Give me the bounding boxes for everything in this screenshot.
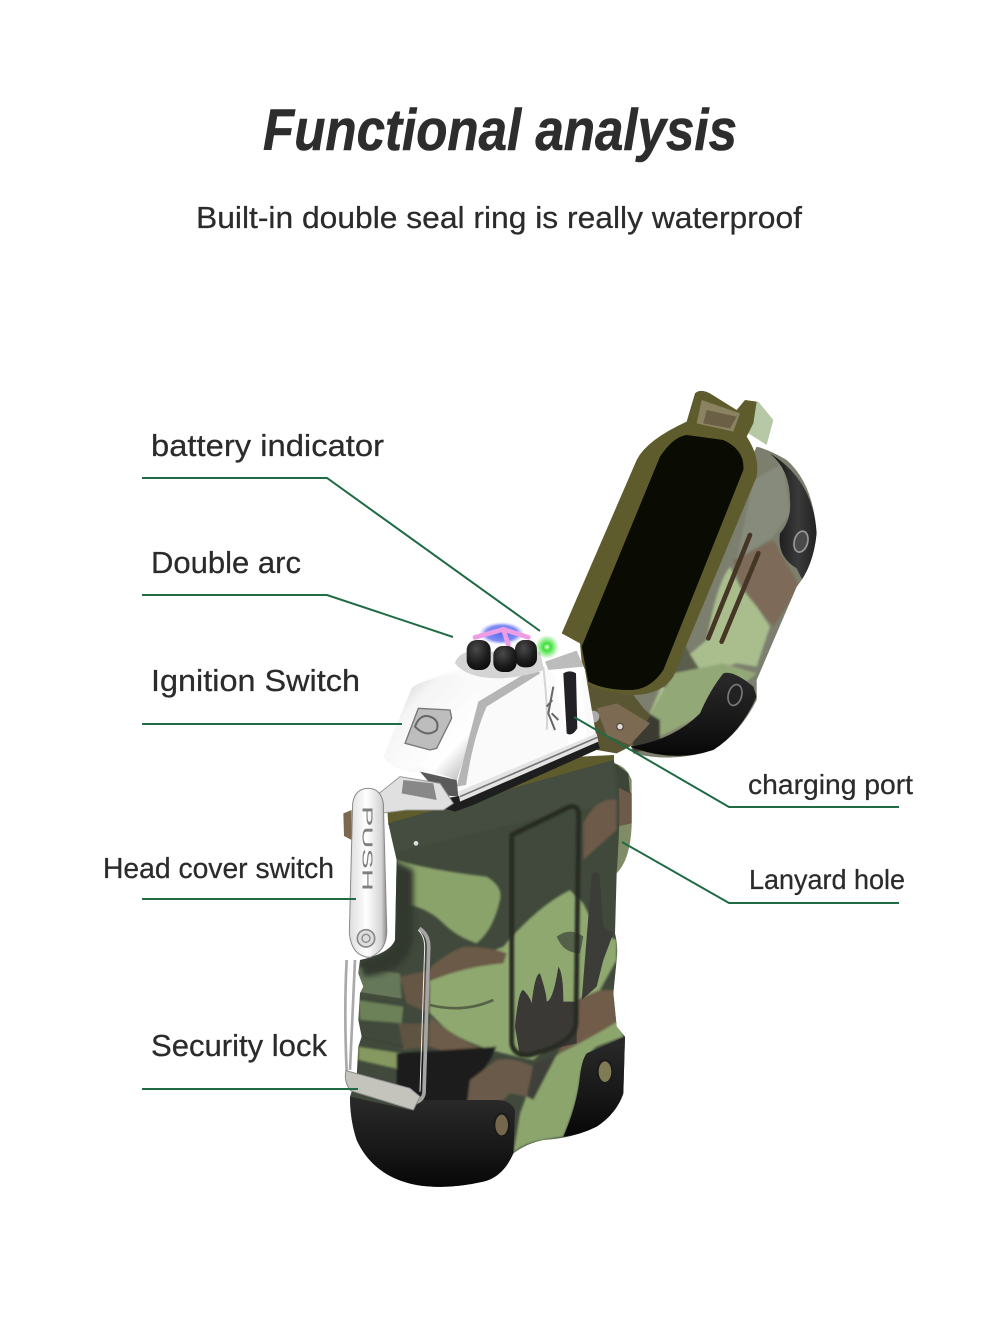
callout: double arc (142, 545, 453, 637)
callout: double arc: Double arc (151, 545, 301, 580)
switch recess shadow (360, 860, 413, 977)
lid bottom black cap (630, 673, 757, 756)
usb symbol (547, 687, 558, 730)
callout: charging port (574, 717, 913, 807)
camo silhouette marks (515, 967, 577, 1057)
switch plate (349, 788, 387, 957)
body top shelf (387, 755, 614, 825)
rib grooves (360, 993, 493, 1047)
chrome lower band (420, 738, 600, 812)
lighter lid (562, 391, 827, 767)
electrode posts and arc (455, 622, 544, 678)
lanyard strip (615, 763, 632, 873)
arc glow (479, 622, 524, 645)
lighter body (343, 755, 637, 1193)
lighter illustration (343, 391, 827, 1193)
hinge backing (582, 677, 650, 753)
bottom black cap left (350, 1097, 515, 1187)
title: Functional analysis (263, 98, 737, 163)
belt clip (512, 806, 579, 1055)
lid vents (708, 535, 758, 642)
chrome body (383, 650, 597, 797)
lid top black cap (770, 453, 817, 582)
callout: charging port: charging port (748, 769, 913, 800)
lid camo shell (630, 446, 817, 758)
infographic canvas (105, 107, 913, 1187)
callout: security lock: Security lock (151, 1028, 327, 1063)
chrome bottom stripes (458, 733, 598, 802)
callout: lanyard hole: Lanyard hole (749, 864, 905, 895)
callout: battery indicator (142, 428, 540, 631)
bottom black cap right (563, 1037, 625, 1137)
callout: ignition switch: Ignition Switch (151, 663, 360, 698)
lid cavity (582, 435, 743, 690)
chrome head (367, 650, 600, 813)
security lock wire (345, 928, 429, 1110)
charging port (563, 671, 577, 735)
head cover switch (343, 788, 387, 957)
callout: lanyard hole (622, 842, 905, 903)
lid tab hole (697, 400, 740, 432)
battery indicator LED (535, 635, 559, 659)
lid rim (562, 391, 757, 695)
subtitle: Built-in double seal ring is really waterproof (196, 200, 802, 235)
base rivets (494, 1114, 509, 1136)
callout: battery indicator: battery indicator (151, 428, 384, 463)
lid tab right (748, 402, 773, 445)
head cover switch: PUSH (358, 806, 374, 891)
lid rivets (792, 530, 810, 554)
callout: head cover switch: Head cover switch (103, 853, 334, 885)
hinge (597, 703, 650, 745)
ignition switch button (405, 708, 452, 750)
left chrome link (367, 777, 453, 813)
